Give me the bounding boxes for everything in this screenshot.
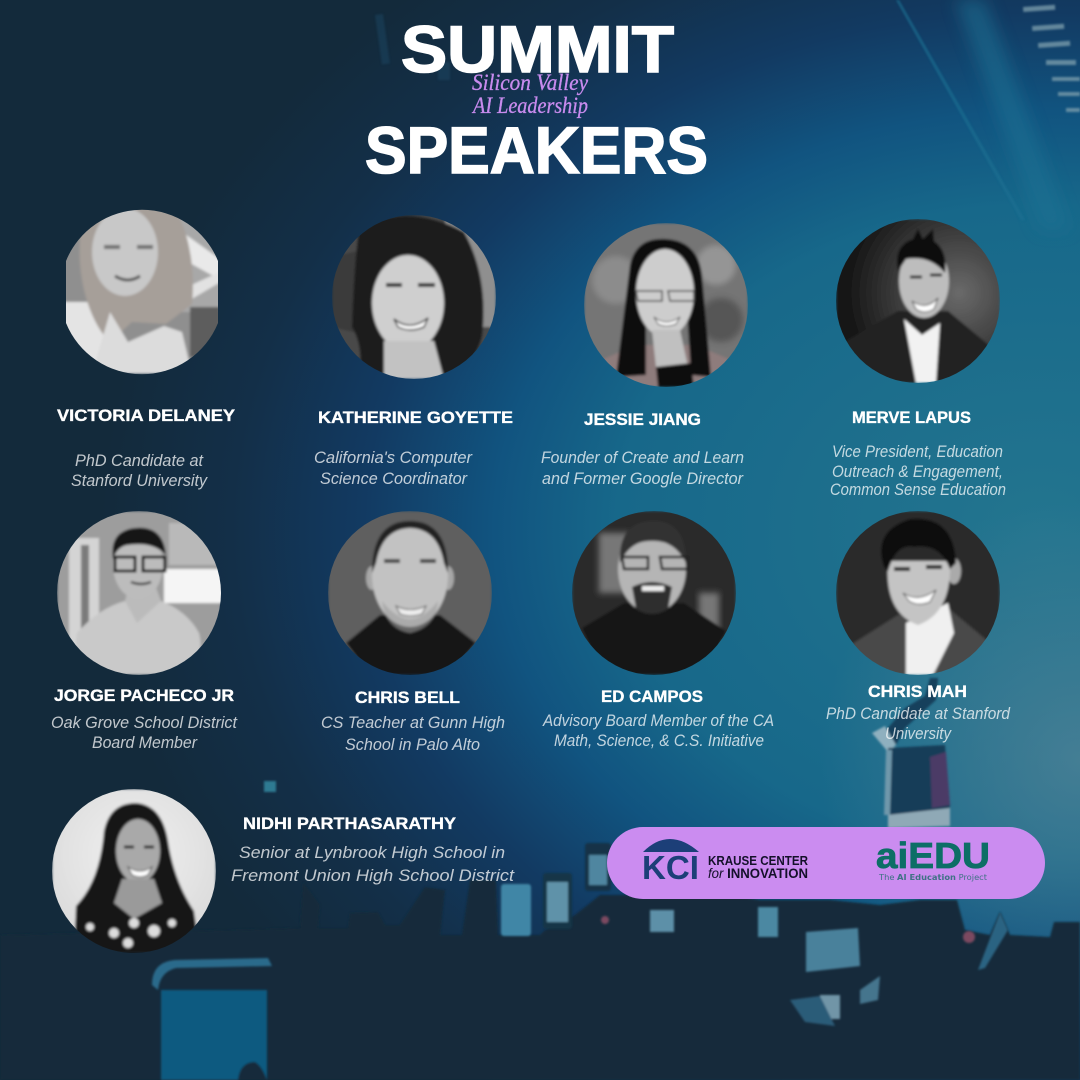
role: Senior at Lynbrook High School in xyxy=(239,843,505,862)
logo: Krause Center for Innovation: for INNOVATION xyxy=(708,865,808,881)
portrait: Jessie Jiang xyxy=(584,223,748,387)
panel: speaker Ed Campos xyxy=(542,511,774,750)
role: and Former Google Director xyxy=(542,469,744,488)
role xyxy=(826,704,1010,743)
role: Fremont Union High School District xyxy=(231,866,515,885)
panel: speaker Merve Lapus xyxy=(830,219,1006,499)
name: CHRIS BELL xyxy=(355,688,460,707)
name: JESSIE JIANG xyxy=(584,410,701,429)
role: Oak Grove School District xyxy=(51,713,238,732)
name: ED CAMPOS xyxy=(601,687,703,706)
role xyxy=(830,442,1006,499)
role: School in Palo Alto xyxy=(345,735,480,754)
portrait: Merve Lapus xyxy=(836,219,1000,383)
role xyxy=(231,843,515,885)
role: Science Coordinator xyxy=(320,469,468,488)
subheading: event name: AI Leadership xyxy=(471,93,588,118)
portrait: Jorge Pacheco Jr xyxy=(57,511,224,675)
panel: speaker Victoria Delaney xyxy=(57,207,236,490)
name: VICTORIA DELANEY xyxy=(57,406,236,425)
role: Advisory Board Member of the CA xyxy=(542,711,774,730)
portrait: Chris Mah xyxy=(836,511,1000,675)
role xyxy=(321,713,505,754)
role: Stanford University xyxy=(71,471,208,490)
role xyxy=(542,711,774,750)
role: Outreach & Engagement, xyxy=(832,462,1003,481)
logo: aiEDU: The AI Education Project xyxy=(878,873,987,882)
role: University xyxy=(885,724,952,743)
logo: aiEDU: aiEDU xyxy=(876,835,990,876)
role: Math, Science, & C.S. Initiative xyxy=(554,731,764,750)
name: JORGE PACHECO JR xyxy=(54,686,234,705)
role: Founder of Create and Learn xyxy=(541,448,744,467)
portrait: Ed Campos xyxy=(572,511,736,675)
name: NIDHI PARTHASARATHY xyxy=(243,814,457,833)
role: PhD Candidate at Stanford xyxy=(826,704,1010,723)
panel: speaker Jorge Pacheco Jr xyxy=(51,511,238,752)
panel: speaker Chris Bell xyxy=(321,511,505,754)
name: CHRIS MAH xyxy=(868,682,967,701)
role xyxy=(541,448,744,488)
title xyxy=(365,12,708,187)
portrait: Katherine Goyette xyxy=(332,215,496,379)
role: PhD Candidate at xyxy=(75,451,204,470)
portrait: Chris Bell xyxy=(328,511,492,675)
panel: speaker Nidhi Parthasarathy xyxy=(52,789,515,953)
name: MERVE LAPUS xyxy=(852,408,971,427)
role: Common Sense Education xyxy=(830,480,1006,499)
role xyxy=(314,448,473,488)
role: Vice President, Education xyxy=(832,442,1003,461)
logo: Krause Center for Innovation xyxy=(642,839,809,886)
role xyxy=(51,713,238,752)
panel: speaker Jessie Jiang xyxy=(541,223,748,488)
portrait: Nidhi Parthasarathy xyxy=(52,789,216,953)
subheading: event name xyxy=(471,70,589,118)
role: California's Computer xyxy=(314,448,473,467)
subheading: event name: Silicon Valley xyxy=(472,70,589,95)
role xyxy=(71,451,208,490)
role: CS Teacher at Gunn High xyxy=(321,713,505,732)
logo: Krause Center for Innovation: KRAUSE CENTER xyxy=(708,853,809,868)
panel: speaker Katherine Goyette xyxy=(314,215,513,488)
portrait: Victoria Delaney xyxy=(60,207,224,374)
crowd silhouette xyxy=(0,880,1080,1080)
heading: summit: SUMMIT xyxy=(401,12,674,86)
stage performer xyxy=(872,678,950,828)
name: KATHERINE GOYETTE xyxy=(318,408,513,427)
phones in crowd xyxy=(152,843,1008,1080)
logo: Krause Center for Innovation: KCI xyxy=(642,849,699,886)
role: Board Member xyxy=(92,733,198,752)
heading: speakers: SPEAKERS xyxy=(365,113,708,187)
panel: speaker Chris Mah xyxy=(826,511,1010,743)
panel: partner logos xyxy=(607,827,1045,899)
